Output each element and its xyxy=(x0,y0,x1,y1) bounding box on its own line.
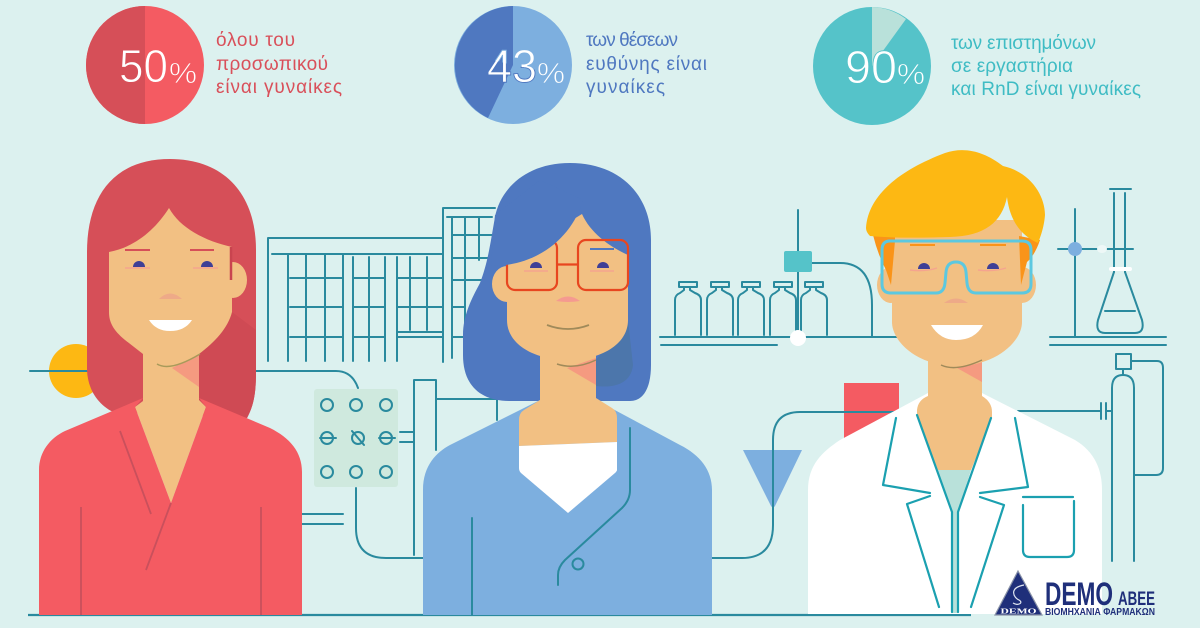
background: funnel and pipe xyxy=(712,403,1112,558)
pie chart: 50% xyxy=(86,6,204,124)
neck shadow xyxy=(567,358,596,385)
label: scientists: των επιστημόνων xyxy=(951,33,1096,54)
hair xyxy=(87,159,256,418)
value: 90%: % xyxy=(897,59,925,91)
label: staff: προσωπικού xyxy=(216,54,328,75)
value: 43%: % xyxy=(537,58,565,90)
hair shadow xyxy=(199,312,256,418)
goggles xyxy=(882,241,1031,293)
nose xyxy=(944,298,968,303)
label: scientists: σε εργαστήρια xyxy=(951,56,1073,77)
jacket seams and button xyxy=(472,428,630,615)
glasses xyxy=(507,240,628,290)
person: blonde scientist in lab coat xyxy=(808,150,1102,614)
logo triangle xyxy=(995,571,1042,616)
background: pill blister panel xyxy=(314,389,398,487)
nose xyxy=(556,296,580,302)
logo triangle: DEMO xyxy=(1000,606,1037,616)
value: 50%: % xyxy=(169,58,197,90)
neck shadow xyxy=(957,358,982,382)
background: lower building and pipes xyxy=(256,371,497,558)
dress xyxy=(39,398,302,615)
face xyxy=(892,220,1022,366)
face xyxy=(109,208,232,364)
label: staff: όλου του xyxy=(216,30,295,51)
hair xyxy=(866,150,1045,243)
value: 50% xyxy=(119,40,197,92)
hair strand xyxy=(230,247,232,280)
ears xyxy=(877,267,1036,303)
pie chart: 43% xyxy=(454,6,572,124)
background: retort stand with flask xyxy=(1058,189,1143,337)
sideburns xyxy=(873,235,1040,285)
logo name: DEMO xyxy=(1045,576,1113,612)
dress folds xyxy=(81,431,261,615)
background: clamp stand with tube xyxy=(784,210,872,346)
label: management: των θέσεων xyxy=(586,30,678,51)
eyes and brows xyxy=(125,250,218,268)
background: yellow circle with line xyxy=(30,344,103,398)
neck and chest xyxy=(519,340,617,446)
label: scientists: και RnD είναι γυναίκες xyxy=(951,79,1141,100)
smile xyxy=(547,325,589,329)
logo: DEMO ABEE xyxy=(995,571,1155,618)
pie chart: 90% xyxy=(813,7,931,125)
label: staff xyxy=(216,30,342,98)
brows xyxy=(910,244,1006,246)
jacket xyxy=(423,400,712,615)
hair shadow xyxy=(596,320,633,387)
value: 43%: 43 xyxy=(487,40,537,92)
eyes xyxy=(910,263,1006,271)
value: 90%: 90 xyxy=(845,41,897,93)
neck shadow xyxy=(172,354,199,387)
face xyxy=(507,214,628,360)
coat lines xyxy=(883,415,1074,612)
neck xyxy=(135,340,206,503)
shirt xyxy=(938,470,971,512)
ear xyxy=(219,262,247,298)
hair bang xyxy=(491,180,583,266)
value: 90% xyxy=(845,41,925,93)
label: management: ευθύνης είναι xyxy=(586,54,707,75)
smile xyxy=(149,320,192,331)
neck and chest xyxy=(917,340,992,470)
nose xyxy=(159,294,182,299)
person: red-haired woman xyxy=(39,159,302,615)
smile xyxy=(931,325,983,340)
coat xyxy=(808,393,1102,614)
background: factory building outline xyxy=(268,208,495,362)
eyes and brow xyxy=(524,249,614,271)
stat: 90 percent of lab and RnD scientists xyxy=(813,7,1141,125)
value: 50%: 50 xyxy=(119,40,168,92)
chin line xyxy=(557,360,596,366)
stat: 50 percent of all staff xyxy=(86,6,342,124)
background: shelf with vials xyxy=(660,282,1166,345)
label: staff: είναι γυναίκες xyxy=(216,77,342,98)
hair xyxy=(463,163,651,401)
base line xyxy=(28,614,971,616)
label: management: γυναίκες xyxy=(586,77,665,98)
background: red square xyxy=(844,383,899,438)
person: blue-haired woman xyxy=(423,163,712,615)
ear xyxy=(492,266,522,302)
value: 43% xyxy=(487,40,565,92)
background: gas cylinder xyxy=(1112,354,1163,561)
chin line xyxy=(157,354,200,366)
label: scientists xyxy=(951,33,1141,100)
label: management xyxy=(586,30,707,98)
chin line xyxy=(941,360,982,368)
shirt xyxy=(519,442,617,513)
logo tagline: ΒΙΟΜΗΧΑΝΙΑ ΦΑΡΜΑΚΩΝ xyxy=(1045,607,1155,618)
logo suffix: ABEE xyxy=(1118,589,1155,610)
stat: 43 percent of management positions xyxy=(454,6,707,124)
